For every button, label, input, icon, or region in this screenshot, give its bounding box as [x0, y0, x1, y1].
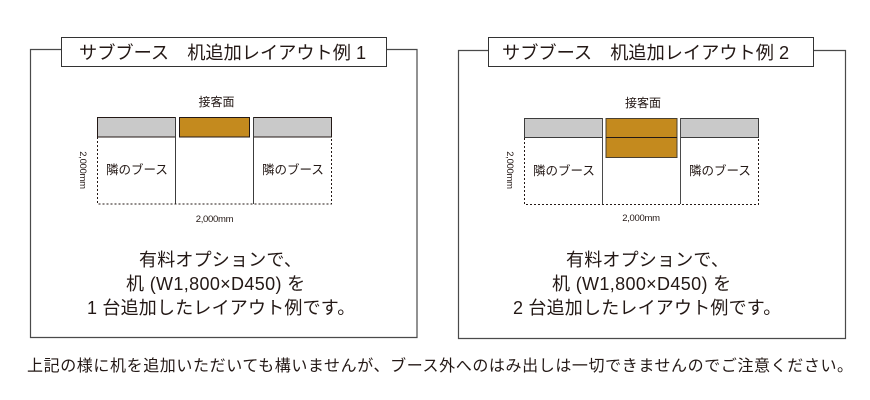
title box 2 — [488, 38, 814, 66]
description 2: 有料オプションで、 — [566, 250, 729, 270]
desks — [606, 118, 677, 158]
description 1 — [87, 250, 355, 318]
description 1: 有料オプションで、 — [139, 250, 302, 270]
footnote: 上記の様に机を追加いただいても構いませんが、ブース外へのはみ出しは一切できませんのでご注意ください。 — [27, 356, 854, 375]
panel: layout example 1 — [30, 38, 417, 338]
title box 1 — [62, 38, 386, 66]
booth diagram 1 — [98, 117, 332, 204]
neighbouring booth label right: 隣のブース — [689, 163, 751, 178]
desk — [180, 118, 250, 137]
customer-facing side label 1: 接客面 — [198, 94, 235, 109]
neighbouring booth label left: 隣のブース — [533, 163, 595, 178]
title box 2: サブブース 机追加レイアウト例 2 — [502, 42, 789, 63]
description 1: 1 台追加したレイアウト例です。 — [87, 298, 355, 318]
neighbouring booth label right: 隣のブース — [262, 162, 324, 177]
neighbouring booth label left: 隣のブース — [106, 162, 168, 177]
description 2: 机 (W1,800×D450) を — [552, 274, 732, 294]
depth dimension 2: 2,000mm — [504, 151, 515, 189]
customer-facing side label 2: 接客面 — [625, 95, 661, 110]
width dimension 1: 2,000mm — [196, 214, 234, 225]
booth diagram 2 — [524, 118, 758, 204]
title box 1: サブブース 机追加レイアウト例 1 — [79, 42, 366, 63]
depth dimension 1: 2,000mm — [77, 151, 88, 189]
panel: layout example 2 — [458, 38, 846, 338]
panel frame 2 — [458, 50, 846, 338]
panel frame 1 — [30, 50, 417, 338]
width dimension 2: 2,000mm — [622, 213, 660, 224]
description 2: 2 台追加したレイアウト例です。 — [513, 298, 781, 318]
description 2 — [513, 250, 781, 318]
description 1: 机 (W1,800×D450) を — [126, 274, 306, 294]
